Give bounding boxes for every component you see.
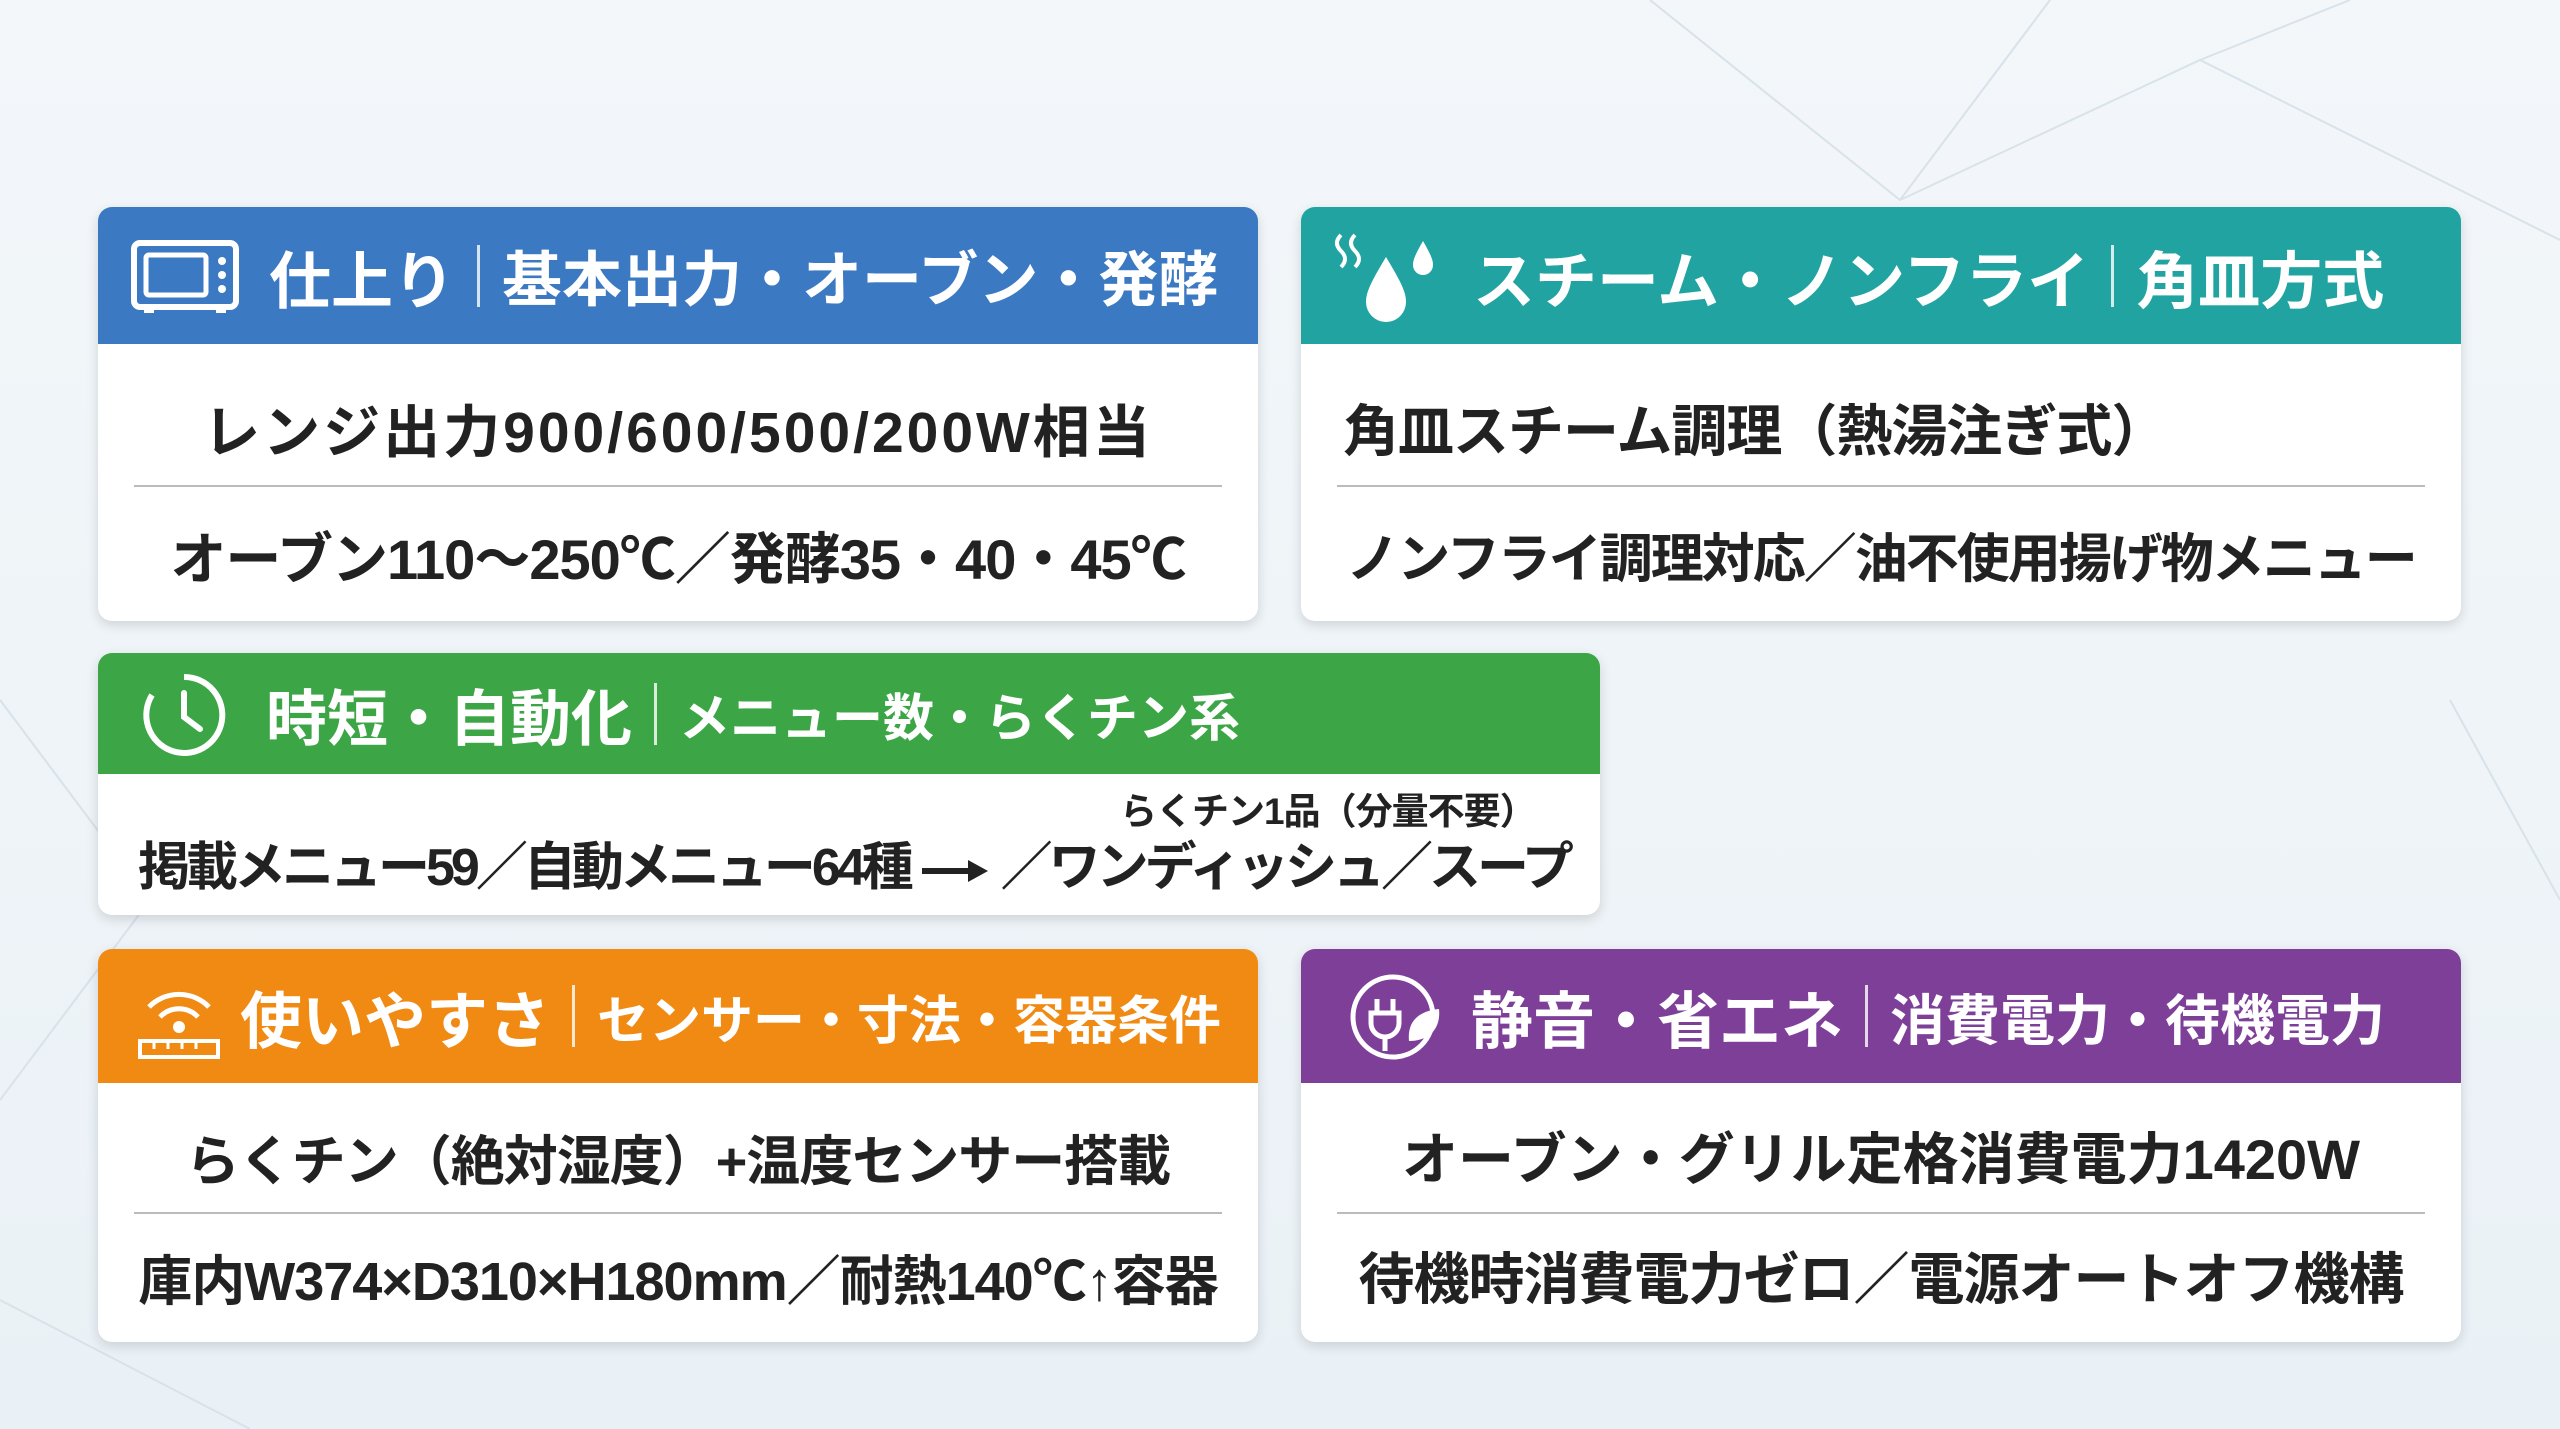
header: finish: 基本出力・オーブン・発酵 bbox=[502, 247, 1218, 314]
header: time saving bbox=[98, 653, 1600, 774]
icon: water drops bbox=[1334, 234, 1433, 322]
icon: clock bbox=[143, 674, 226, 756]
header: time saving: 時短・自動化 bbox=[266, 685, 632, 753]
icon: microwave bbox=[131, 240, 239, 313]
header: time saving: メニュー数・らくチン系 bbox=[679, 690, 1240, 746]
text: small note: らくチン1品（分量不要） bbox=[1120, 791, 1536, 832]
header: usability bbox=[98, 949, 1258, 1083]
text: menus: 掲載メニュー59／自動メニュー64種 ／ワンディッシュ／スープ bbox=[138, 839, 1570, 897]
text: power consumption: オーブン・グリル定格消費電力1420W bbox=[1402, 1128, 2360, 1191]
header: quiet eco: 消費電力・待機電力 bbox=[1890, 990, 2385, 1052]
panel: usability bbox=[98, 949, 1258, 1342]
header: usability: センサー・寸法・容器条件 bbox=[597, 992, 1221, 1050]
header: finish: 仕上り bbox=[269, 248, 455, 316]
text: oven: オーブン110〜250℃／発酵35・40・45℃ bbox=[170, 528, 1186, 591]
header: finish bbox=[98, 207, 1258, 344]
header: quiet eco: 静音・省エネ bbox=[1471, 988, 1843, 1057]
text: sensor: らくチン（絶対湿度）+温度センサー搭載 bbox=[186, 1132, 1170, 1192]
text: nonfry: ノンフライ調理対応／油不使用揚げ物メニュー bbox=[1346, 530, 2416, 589]
panel: quiet eco bbox=[1301, 949, 2461, 1342]
header: usability: 使いやすさ bbox=[240, 988, 550, 1057]
panel: time saving bbox=[98, 653, 1600, 915]
icon: sensor bbox=[138, 992, 220, 1059]
header: steam: 角皿方式 bbox=[2136, 248, 2384, 316]
text: dimensions: 庫内W374×D310×H180mm／耐熱140℃↑容器 bbox=[138, 1252, 1218, 1312]
icon: plug leaf bbox=[1350, 974, 1440, 1060]
text: power: レンジ出力900/600/500/200W相当 bbox=[203, 401, 1153, 465]
header: steam: スチーム・ノンフライ bbox=[1473, 248, 2089, 316]
panel: steam bbox=[1301, 207, 2461, 621]
text: standby: 待機時消費電力ゼロ／電源オートオフ機構 bbox=[1358, 1248, 2404, 1311]
panel: finish bbox=[98, 207, 1258, 621]
text: steam cooking: 角皿スチーム調理（熱湯注ぎ式） bbox=[1343, 400, 2166, 463]
header: quiet eco bbox=[1301, 949, 2461, 1083]
header: steam bbox=[1301, 207, 2461, 344]
